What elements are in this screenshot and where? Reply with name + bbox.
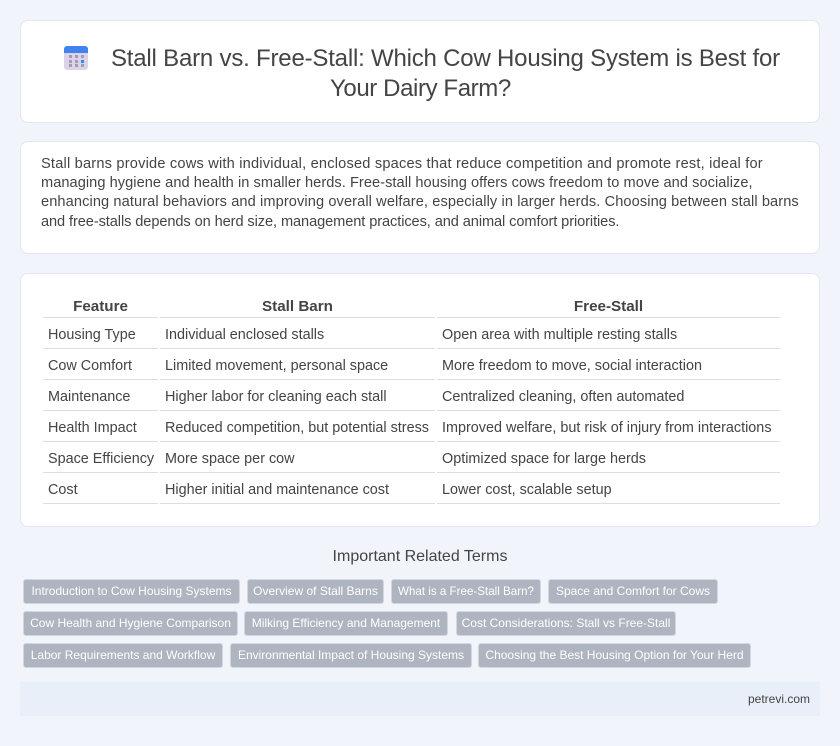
tag — [23, 579, 240, 604]
row: Housing Type: Individual enclosed stalls — [165, 327, 324, 343]
intro text: Stall barns provide cows with individual, enclosed spaces that reduce competition and promote rest, ideal for — [41, 156, 763, 172]
intro text: and free-stalls depends on herd size, management practices, and animal comfort priorities. — [41, 214, 619, 230]
row: Housing Type: Open area with multiple resting stalls — [442, 327, 677, 343]
tag — [23, 643, 223, 668]
tag: Labor Requirements and Workflow — [31, 648, 215, 662]
tag: Cost Considerations: Stall vs Free-Stall — [462, 616, 670, 630]
tag — [247, 579, 384, 604]
table header: Free-Stall: Free-Stall — [574, 298, 643, 315]
footer text: petrevi.com — [748, 692, 810, 706]
table header: Feature: Feature — [73, 298, 128, 315]
intro text: managing hygiene and health in smaller herds. Free-stall housing offers cows freedom to move and socialize, — [41, 175, 753, 191]
title second line: Your Dairy Farm? — [330, 75, 511, 102]
row: Health Impact: Improved welfare, but risk of injury from interactions — [442, 420, 772, 436]
panel: comparison table — [20, 273, 820, 527]
tag: Choosing the Best Housing Option for Your Herd — [485, 648, 744, 662]
row: Cow Comfort: Limited movement, personal space — [165, 358, 388, 374]
row: Housing Type — [48, 327, 677, 343]
tag — [391, 579, 541, 604]
tag — [23, 611, 238, 636]
row: Maintenance: Maintenance — [48, 389, 130, 405]
intro text: enhancing natural behaviors and improving overall welfare, especially in larger herds. Choosing between stall barns — [41, 194, 799, 210]
tag: What is a Free-Stall Barn? — [398, 585, 534, 598]
tag: Overview of Stall Barns — [253, 584, 378, 598]
icon: calendar — [64, 46, 88, 70]
tag — [548, 579, 718, 604]
footer bar — [20, 682, 820, 716]
row: Cow Comfort: Cow Comfort — [48, 358, 132, 374]
row: Cost: Higher initial and maintenance cost — [165, 482, 389, 498]
row: Cost — [48, 482, 612, 498]
heading: related terms: Important Related Terms — [333, 548, 507, 565]
title: Stall Barn vs. Free-Stall: Which Cow Housing System is Best for — [111, 45, 780, 72]
tags: related terms — [23, 579, 751, 668]
row: Space Efficiency: Space Efficiency — [48, 451, 154, 467]
row: Health Impact — [48, 420, 772, 436]
table — [43, 298, 780, 504]
row: Maintenance: Higher labor for cleaning each stall — [165, 389, 387, 405]
row: Cost: Cost — [48, 482, 78, 498]
tag: Introduction to Cow Housing Systems — [31, 584, 232, 598]
row: Cow Comfort: More freedom to move, social interaction — [442, 358, 702, 374]
row: Health Impact: Health Impact — [48, 420, 137, 436]
row: Housing Type: Housing Type — [48, 327, 136, 343]
tag: Cow Health and Hygiene Comparison — [30, 616, 231, 630]
panel: intro paragraph — [20, 141, 820, 254]
row: Space Efficiency — [48, 451, 646, 467]
row: Cost: Lower cost, scalable setup — [442, 482, 612, 498]
tag: Milking Efficiency and Management — [252, 616, 440, 630]
tag: Space and Comfort for Cows — [556, 584, 710, 598]
intro text — [41, 156, 799, 230]
row: Maintenance: Centralized cleaning, often automated — [442, 389, 684, 405]
row: Cow Comfort — [48, 358, 702, 374]
table header: Stall Barn: Stall Barn — [262, 298, 333, 315]
tag: Environmental Impact of Housing Systems — [238, 648, 464, 662]
tag — [230, 643, 472, 668]
row: Space Efficiency: More space per cow — [165, 451, 295, 467]
row: Maintenance — [48, 389, 684, 405]
row: Health Impact: Reduced competition, but potential stress — [165, 420, 429, 436]
header card — [20, 20, 820, 123]
tag — [244, 611, 448, 636]
tag — [478, 643, 751, 668]
row: Space Efficiency: Optimized space for large herds — [442, 451, 646, 467]
tag — [456, 611, 676, 636]
